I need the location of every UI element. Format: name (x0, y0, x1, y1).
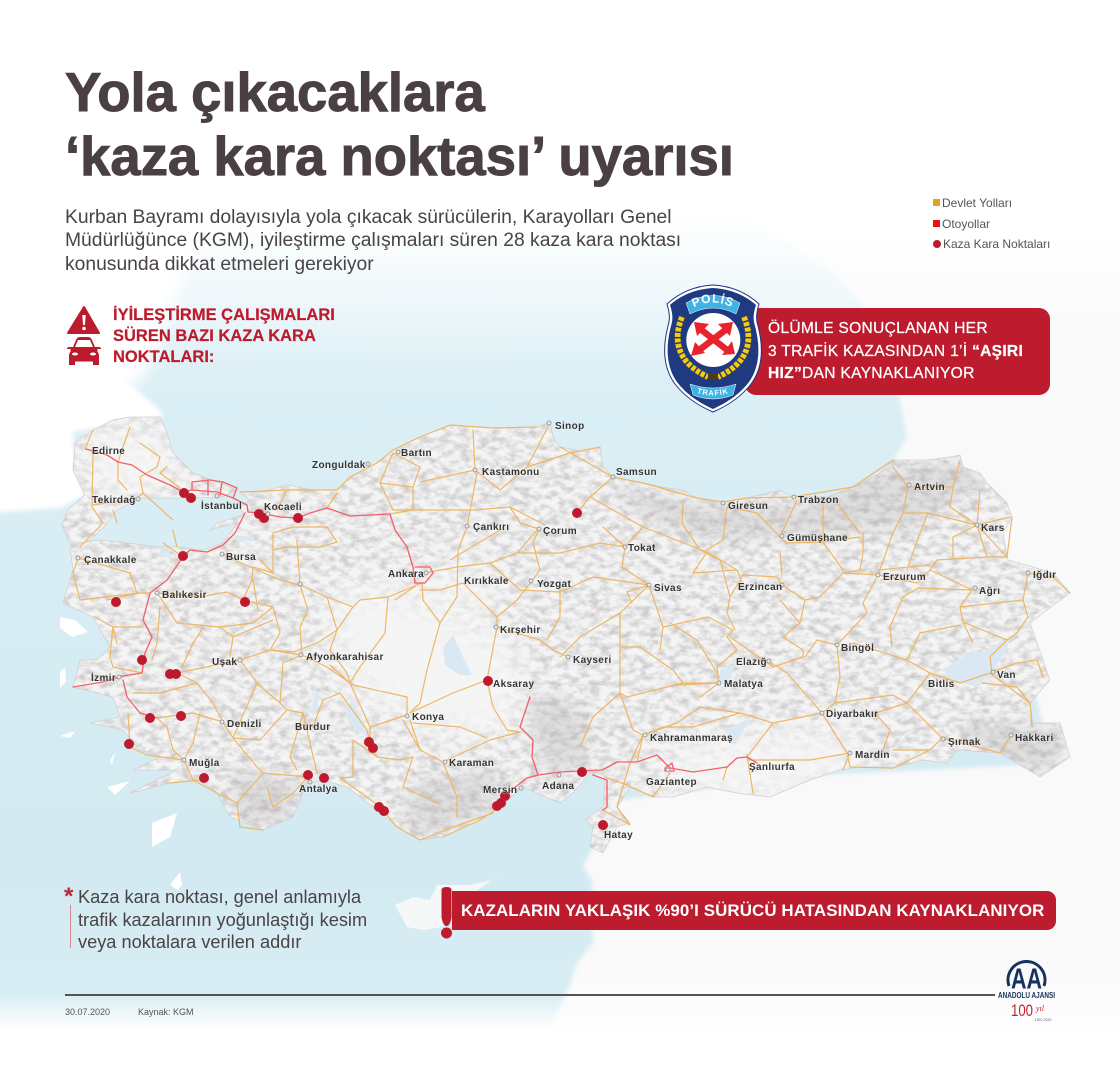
motorways (73, 449, 757, 810)
lakes (157, 535, 1010, 745)
city labels: Ankara (388, 569, 424, 580)
date: 30.07.2020 (65, 1007, 110, 1017)
city labels: Hatay (604, 830, 633, 841)
coastline (62, 417, 1070, 853)
city labels: Konya (412, 712, 444, 723)
city labels: Çanakkale (84, 555, 137, 566)
badge laurel (678, 317, 748, 377)
city labels: İstanbul (201, 499, 242, 512)
asterisk: * (64, 883, 73, 910)
city labels: İzmir (91, 671, 116, 684)
city labels: Uşak (212, 657, 237, 668)
city labels: Denizli (227, 719, 262, 730)
title: Yola çıkacaklara (65, 61, 485, 123)
callout: speeding (745, 308, 1050, 395)
city labels: Kocaeli (264, 502, 302, 513)
callout: driver error (452, 891, 1056, 930)
city labels: Bitlis (928, 679, 955, 690)
badge ribbon: POLİS: POLİS (691, 293, 734, 307)
logo: Anadolu Ajansı: 1920-2020 (1035, 1018, 1051, 1022)
footer rule (65, 994, 995, 996)
city labels: Mersin (483, 785, 517, 796)
city labels: Çankırı (473, 522, 509, 533)
city labels: Edirne (92, 446, 125, 457)
legend: Devlet Yolları: Devlet Yolları (942, 196, 1012, 210)
city labels: Samsun (616, 467, 657, 478)
source: Kaynak: KGM (138, 1007, 194, 1017)
kaza kara noktası markers (111, 488, 608, 830)
city labels: Muğla (189, 758, 220, 769)
city labels: Artvin (914, 482, 945, 493)
footnote text: Kaza kara noktası, genel anlamıyla (78, 887, 361, 907)
city labels: Kırıkkale (464, 576, 509, 587)
city labels: Diyarbakır (826, 709, 878, 720)
city labels: Balıkesir (162, 590, 207, 601)
city labels: Bartın (401, 448, 432, 459)
city labels: Kahramanmaraş (650, 733, 733, 744)
badge crossed arrows (691, 322, 735, 356)
city labels: Kars (981, 523, 1005, 534)
city labels: Burdur (295, 722, 330, 733)
city labels: Elazığ (736, 657, 767, 668)
callout text: ÖLÜMLE SONUÇLANAN HER (768, 320, 988, 337)
city labels: Hakkari (1015, 733, 1054, 744)
title: ‘kaza kara noktası’ uyarısı (65, 125, 734, 187)
city labels: Afyonkarahisar (306, 652, 384, 663)
city labels: Yozgat (537, 579, 571, 590)
badge ribbon: TRAFİK: TRAFİK (698, 388, 728, 396)
city labels: Gümüşhane (787, 533, 848, 544)
city labels: Karaman (449, 758, 494, 769)
footnote text (78, 887, 367, 952)
city labels: Kırşehir (500, 625, 541, 636)
city labels: Van (997, 670, 1016, 681)
logo: Anadolu Ajansı: 100 (1011, 1001, 1033, 1020)
city labels: Sivas (654, 583, 682, 594)
logo: Anadolu Ajansı (998, 960, 1055, 1022)
city labels: Erzincan (738, 582, 782, 593)
city labels: Mardin (855, 750, 890, 761)
legend (933, 196, 1050, 251)
city labels (84, 421, 1056, 841)
map of Turkey (0, 257, 1071, 1022)
footnote text: trafik kazalarının yoğunlaştığı kesim (78, 910, 367, 930)
footnote text: veya noktalara verilen addır (78, 932, 301, 952)
heading: improvement works: İYİLEŞTİRME ÇALIŞMALARI (113, 306, 335, 324)
icon: police badge (664, 284, 762, 412)
subtitle: Kurban Bayramı dolayısıyla yola çıkacak sürücülerin, Karayolları Genel (65, 206, 672, 228)
city labels: Bursa (226, 552, 256, 563)
city labels: Adana (542, 781, 574, 792)
city labels: Bingöl (841, 643, 874, 654)
icon: exclamation mark (441, 887, 452, 938)
city labels: Iğdır (1033, 570, 1056, 581)
callout text (768, 320, 1023, 382)
city labels: Sinop (555, 421, 585, 432)
city labels: Şırnak (948, 737, 981, 748)
city labels: Malatya (724, 679, 763, 690)
heading: improvement works: SÜREN BAZI KAZA KARA (113, 327, 316, 345)
city labels: Antalya (299, 784, 338, 795)
heading: improvement works: NOKTALARI: (113, 348, 214, 366)
land base with terrain shading (62, 418, 1070, 852)
city labels: Tekirdağ (92, 495, 136, 506)
city labels: Erzurum (883, 572, 926, 583)
footnote (64, 883, 367, 952)
callout text: KAZALARIN YAKLAŞIK %90’I SÜRÜCÜ HATASINDAN KAYNAKLANIYOR (461, 901, 1044, 920)
city labels: Zonguldak (312, 460, 366, 471)
legend: Kaza Kara Noktaları: Kaza Kara Noktaları (943, 237, 1050, 251)
city labels: Aksaray (493, 679, 534, 690)
city markers (76, 421, 1030, 790)
legend: Otoyollar: Otoyollar (942, 217, 990, 231)
state roads (73, 425, 1070, 840)
callout text: HIZ”DAN KAYNAKLANIYOR (768, 365, 975, 382)
city labels: Trabzon (798, 495, 839, 506)
logo: Anadolu Ajansı: yıl (1035, 1004, 1045, 1013)
city labels: Şanlıurfa (749, 762, 795, 773)
subtitle: konusunda dikkat etmeleri gerekiyor (65, 254, 374, 274)
city labels: Tokat (628, 543, 656, 554)
city labels: Ağrı (979, 586, 1000, 597)
callout text: 3 TRAFİK KAZASINDAN 1’İ “AŞIRI (768, 342, 1023, 360)
city labels: Giresun (728, 501, 768, 512)
heading: improvement works (113, 306, 335, 366)
city labels: Çorum (543, 526, 577, 537)
logo: Anadolu Ajansı: AA (1011, 964, 1042, 996)
subtitle: Müdürlüğünce (KGM), iyileştirme çalışmaları süren 28 kaza kara noktası (65, 230, 681, 251)
city labels: Kastamonu (482, 467, 540, 478)
city labels: Gaziantep (646, 777, 697, 788)
city labels: Kayseri (573, 655, 612, 666)
icon: warning triangle and car (67, 306, 101, 365)
subtitle (65, 206, 681, 274)
title (65, 61, 734, 187)
